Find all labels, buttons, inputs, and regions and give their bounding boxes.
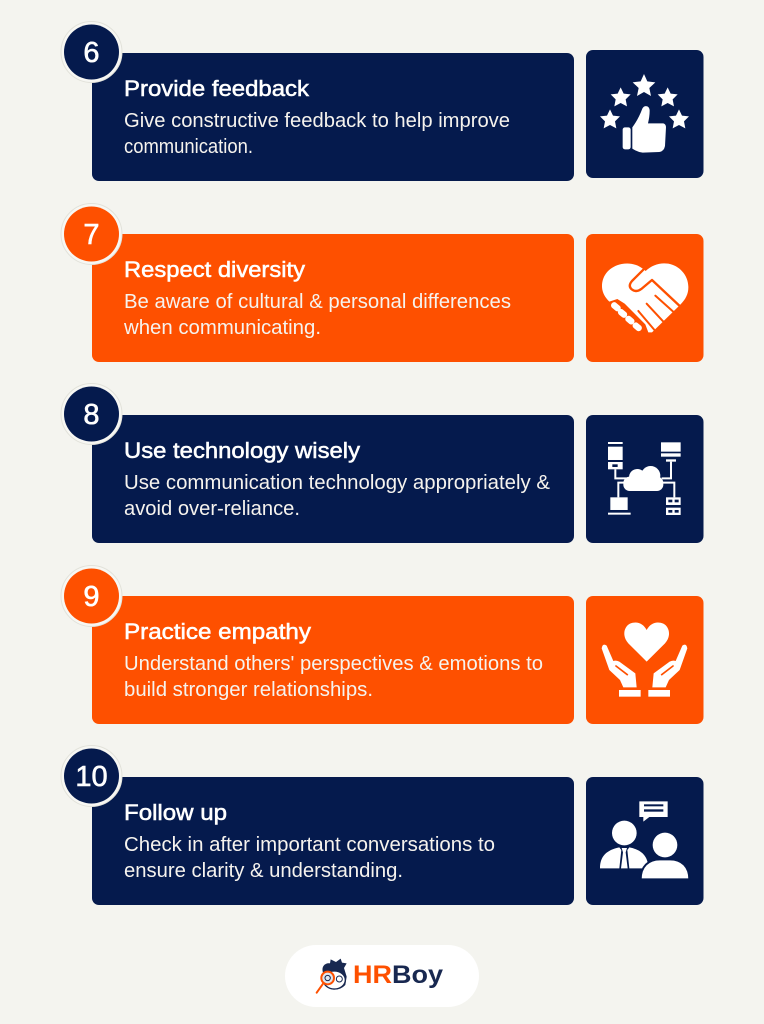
heading: follow up: Follow up: [124, 800, 227, 825]
card: respect diversity: [92, 234, 574, 362]
card: practice empathy: [92, 596, 574, 724]
badge: number 10: 10: [75, 761, 108, 793]
text: tip 8 description: Use communication technology appropriately &: [124, 472, 551, 494]
text: tip 9 description: [124, 653, 543, 701]
badge: number 10: [61, 746, 122, 806]
badge: number 9: [61, 566, 122, 626]
heading: provide feedback: Provide feedback: [124, 76, 310, 101]
badge: number 7: 7: [83, 219, 100, 251]
text: tip 8 description: avoid over-reliance.: [124, 498, 300, 520]
text: tip 6 description: communication.: [124, 136, 253, 158]
badge: number 7: [61, 204, 122, 264]
text: tip 6 description: Give constructive feedback to help improve: [124, 110, 510, 132]
icon: thumbs up with stars: [586, 50, 704, 178]
text: tip 7 description: Be aware of cultural & personal differences: [124, 291, 511, 313]
text: tip 8 description: [124, 472, 551, 520]
text: tip 7 description: [123, 291, 511, 339]
icon: hands holding heart: [586, 596, 704, 724]
panel: tip 7: [61, 204, 704, 362]
badge: number 6: [61, 22, 122, 82]
panel: tip 9: [61, 566, 704, 724]
icon: two people talking: [586, 777, 704, 905]
heading: practice empathy: Practice empathy: [124, 619, 312, 644]
text: tip 9 description: Understand others' perspectives & emotions to: [124, 653, 543, 675]
icon: cloud network: [586, 415, 704, 543]
text: tip 6 description: [124, 110, 510, 158]
icon: cartoon face with magnifier: [317, 959, 347, 993]
text: tip 10 description: ensure clarity & understanding.: [124, 860, 403, 882]
heading: use technology wisely: Use technology wisely: [124, 438, 361, 463]
badge: number 9: 9: [83, 581, 100, 613]
card: provide feedback: [92, 53, 574, 181]
card: follow up: [92, 777, 574, 905]
panel: tip 8: [61, 384, 704, 543]
logo: HRBoy: [285, 945, 479, 1007]
icon: heart handshake: [586, 234, 704, 362]
badge: number 8: 8: [83, 399, 100, 431]
badge: number 8: [61, 384, 122, 444]
logo wordmark: HRBoy: [353, 961, 443, 989]
text: tip 10 description: Check in after important conversations to: [124, 834, 495, 856]
panel: tip 10: [61, 746, 704, 905]
panel: tip 6: [61, 22, 704, 181]
text: tip 10 description: [124, 834, 495, 882]
text: tip 9 description: build stronger relationships.: [124, 679, 373, 701]
heading: respect diversity: Respect diversity: [124, 257, 306, 282]
card: use technology wisely: [92, 415, 574, 543]
text: tip 7 description: when communicating.: [123, 317, 321, 339]
badge: number 6: 6: [83, 37, 100, 69]
